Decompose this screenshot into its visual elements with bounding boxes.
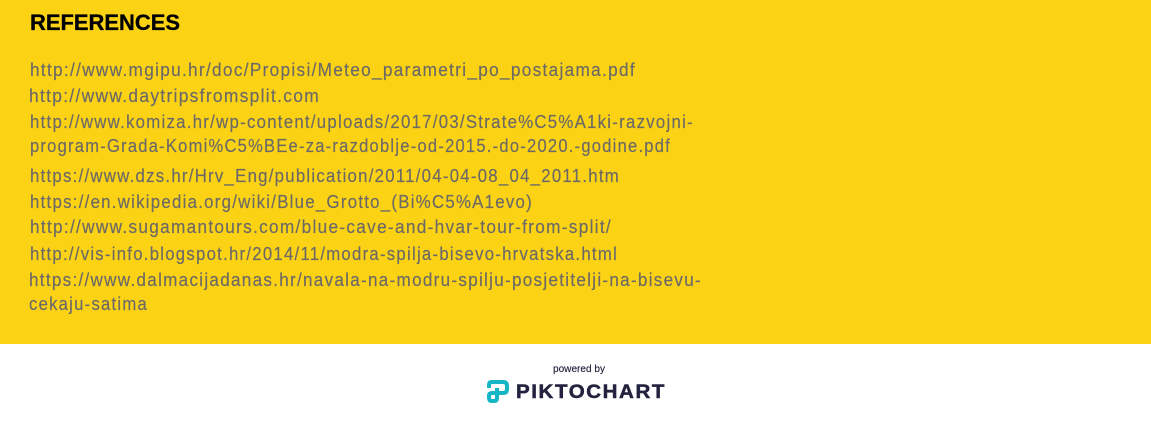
reference 7: http://vis-info.blogspot.hr/2014/11/modra-spilja-bisevo-hrvatska.html: [30, 243, 618, 264]
reference 3: [30, 111, 694, 156]
reference 8: cekaju-satima: [29, 293, 148, 314]
reference list: [29, 59, 702, 314]
icon: Piktochart logo: [489, 382, 507, 401]
reference 3: program-Grada-Komi%C5%BEe-za-razdoblje-od-2015.-do-2020.-godine.pdf: [30, 135, 671, 156]
reference 2: http://www.daytripsfromsplit.com: [29, 85, 320, 106]
reference 3: http://www.komiza.hr/wp-content/uploads/2017/03/Strate%C5%A1ki-razvojni-: [30, 111, 694, 132]
footer: powered by Piktochart: [489, 364, 666, 403]
Piktochart wordmark: PIKTOCHART: [516, 381, 666, 403]
reference 1: http://www.mgipu.hr/doc/Propisi/Meteo_parametri_po_postajama.pdf: [30, 59, 636, 81]
reference 5: https://en.wikipedia.org/wiki/Blue_Grotto_(Bi%C5%A1evo): [30, 191, 533, 213]
reference 8: https://www.dalmacijadanas.hr/navala-na-modru-spilju-posjetitelji-na-bisevu-: [29, 269, 702, 290]
reference 4: https://www.dzs.hr/Hrv_Eng/publication/2011/04-04-08_04_2011.htm: [30, 165, 620, 187]
reference 6: http://www.sugamantours.com/blue-cave-and-hvar-tour-from-split/: [30, 216, 612, 237]
powered by label: powered by: [553, 364, 605, 375]
reference 8: [29, 269, 702, 314]
heading: references: REFERENCES: [30, 10, 180, 35]
